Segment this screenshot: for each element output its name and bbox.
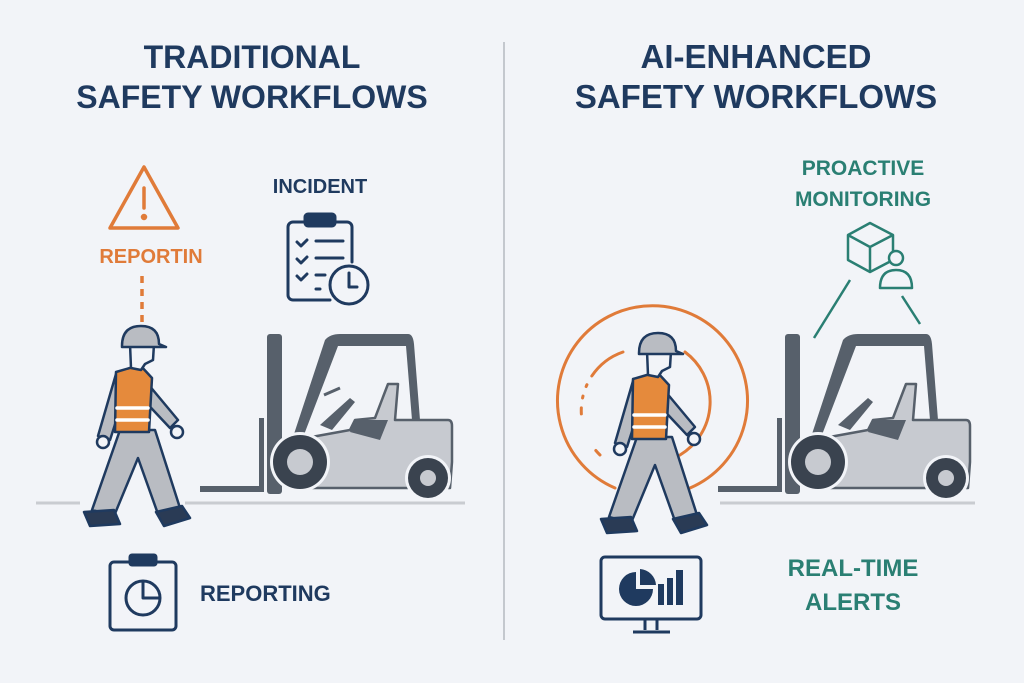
label: real-time alerts bbox=[788, 555, 918, 616]
worker left bbox=[84, 326, 190, 526]
label: proactive monitoring bbox=[795, 157, 931, 211]
ground lines bbox=[36, 502, 975, 504]
icon: reporting clipboard bbox=[110, 555, 176, 630]
forklift left bbox=[200, 334, 452, 501]
dashed connector bbox=[140, 276, 144, 322]
title: AI-enhanced: AI-ENHANCED bbox=[640, 38, 872, 75]
title: traditional: SAFETY WORKFLOWS bbox=[76, 79, 428, 115]
label: proactive monitoring: MONITORING bbox=[795, 188, 931, 211]
label: reportin: REPORTIN bbox=[99, 246, 203, 268]
title: traditional bbox=[76, 39, 428, 115]
worker right bbox=[601, 333, 707, 533]
label: incident: INCIDENT bbox=[273, 176, 367, 198]
label: real-time alerts: REAL-TIME bbox=[788, 555, 918, 582]
title: AI-enhanced: SAFETY WORKFLOWS bbox=[575, 78, 937, 115]
label: real-time alerts: ALERTS bbox=[805, 589, 901, 616]
icon: warning triangle bbox=[110, 167, 178, 228]
icon: cube and person bbox=[848, 223, 912, 288]
proximity rings bbox=[558, 306, 748, 488]
title: traditional: TRADITIONAL bbox=[144, 39, 360, 75]
icon: dashboard monitor bbox=[601, 557, 701, 632]
monitoring lines bbox=[814, 280, 920, 338]
forklift right bbox=[718, 334, 970, 501]
label: reporting: REPORTING bbox=[200, 581, 331, 606]
icon: incident clipboard bbox=[288, 214, 368, 304]
label: proactive monitoring: PROACTIVE bbox=[802, 157, 924, 180]
title: AI-enhanced bbox=[575, 38, 937, 115]
